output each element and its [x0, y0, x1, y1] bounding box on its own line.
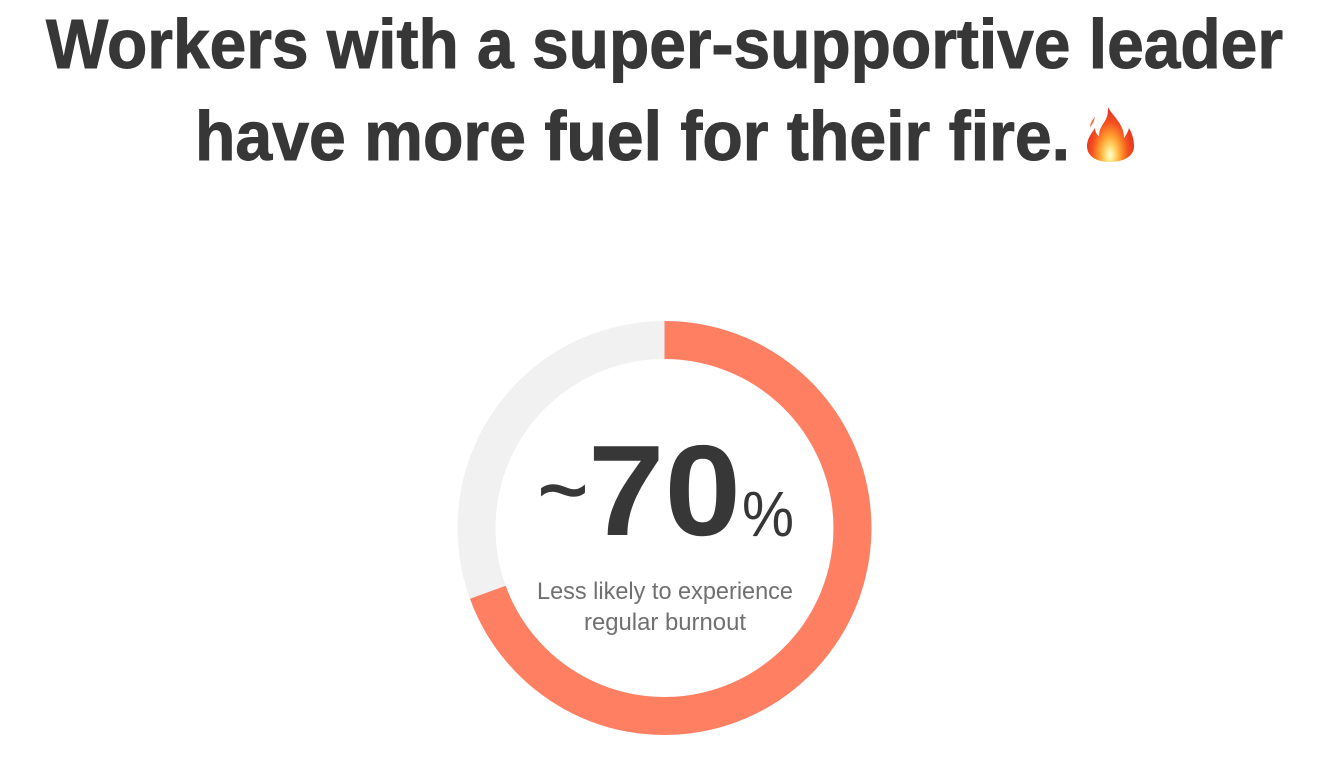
donut track: [476, 340, 852, 716]
title: [46, 5, 1283, 175]
icon: fire emoji: [1087, 107, 1134, 162]
title line 1: Workers with a super-supportive leader: [46, 5, 1283, 83]
stat caption: [537, 578, 793, 636]
donut chart: ~70%: [476, 340, 852, 716]
caption line 2: regular burnout: [584, 609, 746, 636]
big statistic: [538, 419, 794, 563]
tilde: ~: [538, 440, 588, 539]
donut value arc: [488, 340, 852, 716]
percent sign: %: [742, 478, 794, 550]
title line 2: have more fuel for their fire.: [195, 97, 1070, 175]
number 70: 70: [588, 419, 741, 563]
caption line 1: Less likely to experience: [537, 578, 793, 605]
